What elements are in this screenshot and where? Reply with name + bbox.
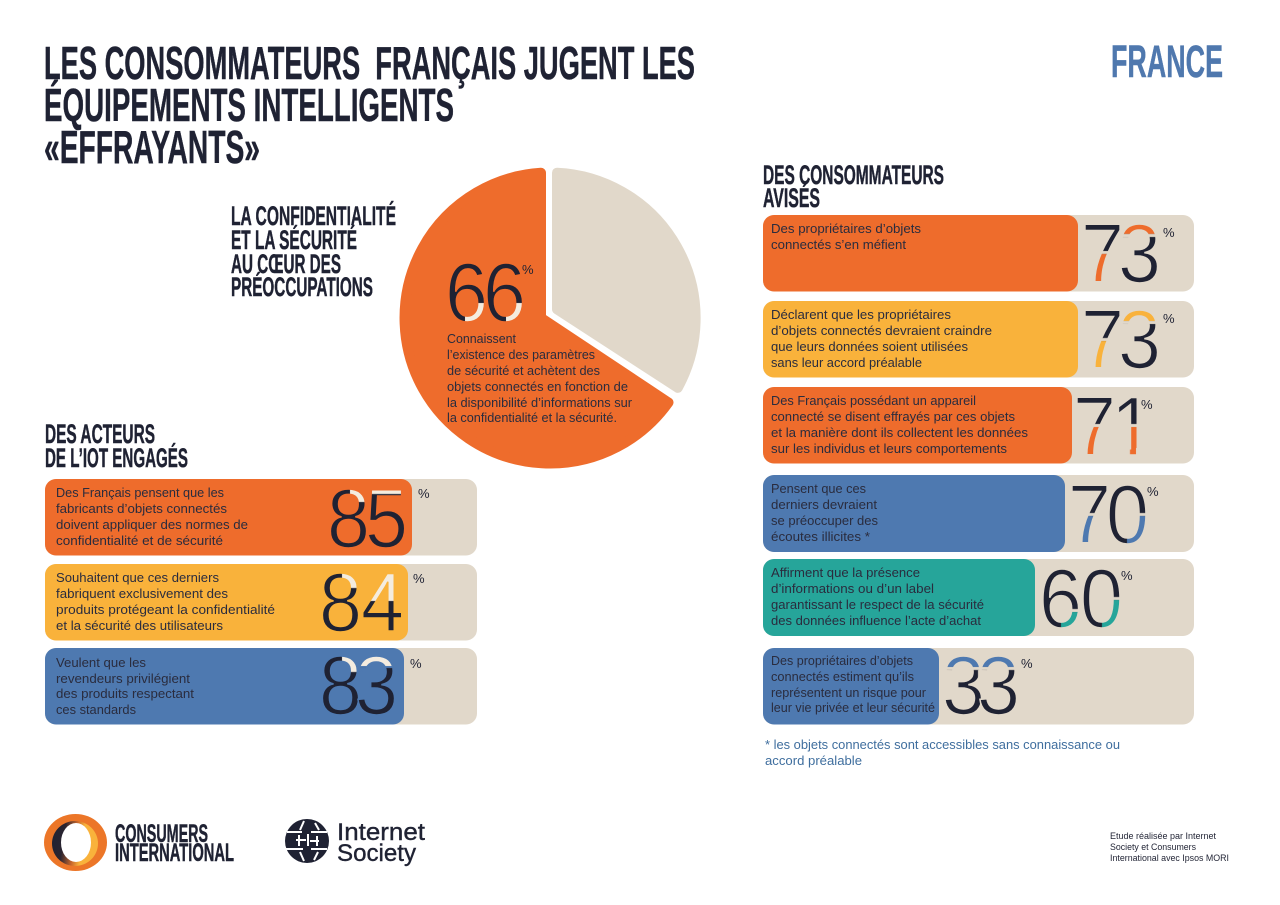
- icon: ring: [44, 814, 107, 871]
- panel: bar 60 percent: Affirment que la présence: [771, 566, 920, 580]
- panel: bar 71 percent: %: [1141, 397, 1153, 412]
- panel: bar 70 percent: derniers devraient: [771, 498, 878, 512]
- panel: bar 73 percent data use: que leurs données soient utilisées: [771, 340, 968, 354]
- title: [44, 37, 695, 173]
- footnote: accord préalable: [765, 754, 862, 768]
- panel: bar 84 percent: 84: [319, 556, 404, 650]
- panel: bar 73 percent data use: Déclarent que les propriétaires: [771, 308, 951, 322]
- panel: bar 85 percent: %: [418, 486, 430, 501]
- panel: bar 84 percent: Souhaitent que ces derniers: [56, 571, 219, 585]
- panel: bar 33 percent: %: [1021, 656, 1033, 671]
- panel: bar 71 percent: et la manière dont ils collectent les données: [771, 426, 1028, 440]
- panel: bar 73 percent owners: connectés s’en méfient: [771, 238, 907, 252]
- panel: bar 83 percent: [45, 639, 477, 733]
- panel: bar 83 percent: Veulent que les: [56, 656, 146, 670]
- pie slice: 66 percent: [405, 173, 668, 464]
- panel: bar 33 percent: Des propriétaires d’objets: [771, 654, 913, 668]
- panel: bar 71 percent: sur les individus et leurs comportements: [771, 442, 1007, 456]
- heading: informed consumers: [763, 160, 944, 213]
- panel: bar 71 percent: connecté se disent effrayés par ces objets: [771, 410, 1015, 424]
- footnote: * les objets connectés sont accessibles sans connaissance ou: [765, 738, 1120, 752]
- panel: bar 71 percent: [763, 380, 1194, 474]
- title: ÉQUIPEMENTS INTELLIGENTS: [44, 79, 454, 131]
- pie text: l’existence des paramètres: [447, 348, 595, 362]
- heading: informed consumers: DES CONSOMMATEURS: [763, 160, 944, 190]
- panel: bar 84 percent: fabriquent exclusivement des: [56, 587, 228, 601]
- title: «EFFRAYANTS»: [44, 121, 260, 173]
- panel: bar 33 percent: connectés estiment qu’ils: [771, 670, 914, 684]
- heading: IoT players: DES ACTEURS: [45, 419, 155, 449]
- logo: Internet Society: [285, 819, 425, 867]
- panel: bar 33 percent: [763, 639, 1194, 733]
- panel: bar 83 percent: 83: [319, 639, 398, 733]
- panel: bar 60 percent: 60: [1039, 552, 1123, 646]
- logo: Internet Society: Society: [337, 840, 416, 867]
- panel: bar 73 percent owners: [763, 207, 1194, 301]
- panel: bar 70 percent: se préoccuper des: [771, 514, 878, 528]
- logo: Internet Society: Internet: [337, 819, 425, 846]
- heading: privacy and security: [231, 200, 396, 302]
- panel: bar 85 percent: doivent appliquer des normes de: [56, 518, 248, 532]
- source note: [1110, 831, 1229, 863]
- panel: bar 73 percent data use: sans leur accord préalable: [771, 356, 922, 370]
- panel: bar 70 percent: %: [1147, 484, 1159, 499]
- pie text: objets connectés en fonction de: [447, 380, 628, 394]
- icon: globe: [285, 819, 329, 863]
- footnote: [765, 738, 1120, 768]
- panel: bar 85 percent: 85: [327, 472, 408, 566]
- panel: bar 85 percent: fabricants d’objets connectés: [56, 502, 227, 516]
- panel: bar 73 percent owners: 73: [1081, 207, 1161, 301]
- panel: bar 83 percent: %: [410, 656, 422, 671]
- panel: bar 84 percent: %: [413, 571, 425, 586]
- panel: bar 73 percent data use: d’objets connectés devraient craindre: [771, 324, 992, 338]
- panel: bar 83 percent: revendeurs privilégient: [56, 672, 191, 686]
- heading: IoT players: [45, 419, 188, 473]
- panel: bar 73 percent data use: %: [1163, 311, 1175, 326]
- panel: bar 33 percent: 33: [942, 639, 1020, 733]
- panel: bar 70 percent: [763, 468, 1194, 562]
- heading: privacy and security: AU CŒUR DES: [231, 249, 341, 279]
- heading: IoT players: DE L’IOT ENGAGÉS: [45, 442, 188, 473]
- panel: bar 73 percent owners: Des propriétaires d’objets: [771, 222, 921, 236]
- pie text: la disponibilité d’informations sur: [447, 396, 632, 410]
- heading: privacy and security: LA CONFIDENTIALITÉ: [231, 200, 396, 231]
- panel: bar 70 percent: écoutes illicites *: [771, 530, 870, 544]
- panel: bar 85 percent: confidentialité et de sécurité: [56, 534, 223, 548]
- panel: bar 33 percent: leur vie privée et leur sécurité: [771, 701, 935, 715]
- number: 66 percent: %: [522, 262, 534, 277]
- panel: bar 60 percent: d’informations ou d’un label: [771, 582, 934, 596]
- panel: bar 83 percent: des produits respectant: [56, 687, 195, 701]
- pie text: la confidentialité et la sécurité.: [447, 411, 617, 425]
- panel: bar 73 percent owners: %: [1163, 225, 1175, 240]
- panel: bar 83 percent: ces standards: [56, 703, 136, 717]
- panel: bar 70 percent: Pensent que ces: [771, 482, 866, 496]
- number: 66 percent: 66: [445, 246, 526, 340]
- panel: bar 70 percent: 70: [1068, 468, 1149, 562]
- panel: bar 85 percent: Des Français pensent que les: [56, 486, 224, 500]
- heading: privacy and security: PRÉOCCUPATIONS: [231, 271, 373, 302]
- heading: informed consumers: AVISÉS: [763, 182, 820, 213]
- source note: Society et Consumers: [1110, 842, 1196, 852]
- source note: International avec Ipsos MORI: [1110, 853, 1229, 863]
- source note: Etude réalisée par Internet: [1110, 831, 1216, 841]
- logo: Consumers International: [44, 814, 234, 871]
- panel: bar 84 percent: [45, 556, 477, 650]
- panel: bar 84 percent: produits protégeant la confidentialité: [56, 603, 275, 617]
- pie text: [447, 332, 632, 425]
- panel: bar 60 percent: %: [1121, 568, 1133, 583]
- heading: privacy and security: ET LA SÉCURITÉ: [231, 224, 357, 255]
- panel: bar 73 percent data use: 73: [1081, 293, 1161, 387]
- logo: Consumers International: INTERNATIONAL: [115, 839, 234, 867]
- logo: Consumers International: CONSUMERS: [115, 820, 208, 848]
- panel: bar 84 percent: et la sécurité des utilisateurs: [56, 619, 223, 633]
- panel: bar 60 percent: [763, 552, 1194, 646]
- pie chart: 66 percent: [405, 173, 696, 464]
- pie text: Connaissent: [447, 332, 517, 346]
- panel: bar 85 percent: [45, 472, 477, 566]
- panel: bar 60 percent: garantissant le respect de la sécurité: [771, 598, 984, 612]
- title: LES CONSOMMATEURS FRANÇAIS JUGENT LES: [44, 37, 695, 89]
- panel: bar 73 percent data use: [763, 293, 1194, 387]
- pie text: de sécurité et achètent des: [447, 364, 600, 378]
- panel: bar 71 percent: 71: [1073, 380, 1154, 474]
- pie slice: remaining 34 percent: [557, 173, 696, 388]
- panel: bar 33 percent: représentent un risque pour: [771, 686, 926, 700]
- panel: bar 71 percent: Des Français possédant un appareil: [771, 394, 976, 408]
- panel: bar 60 percent: des données influence l’acte d’achat: [771, 614, 982, 628]
